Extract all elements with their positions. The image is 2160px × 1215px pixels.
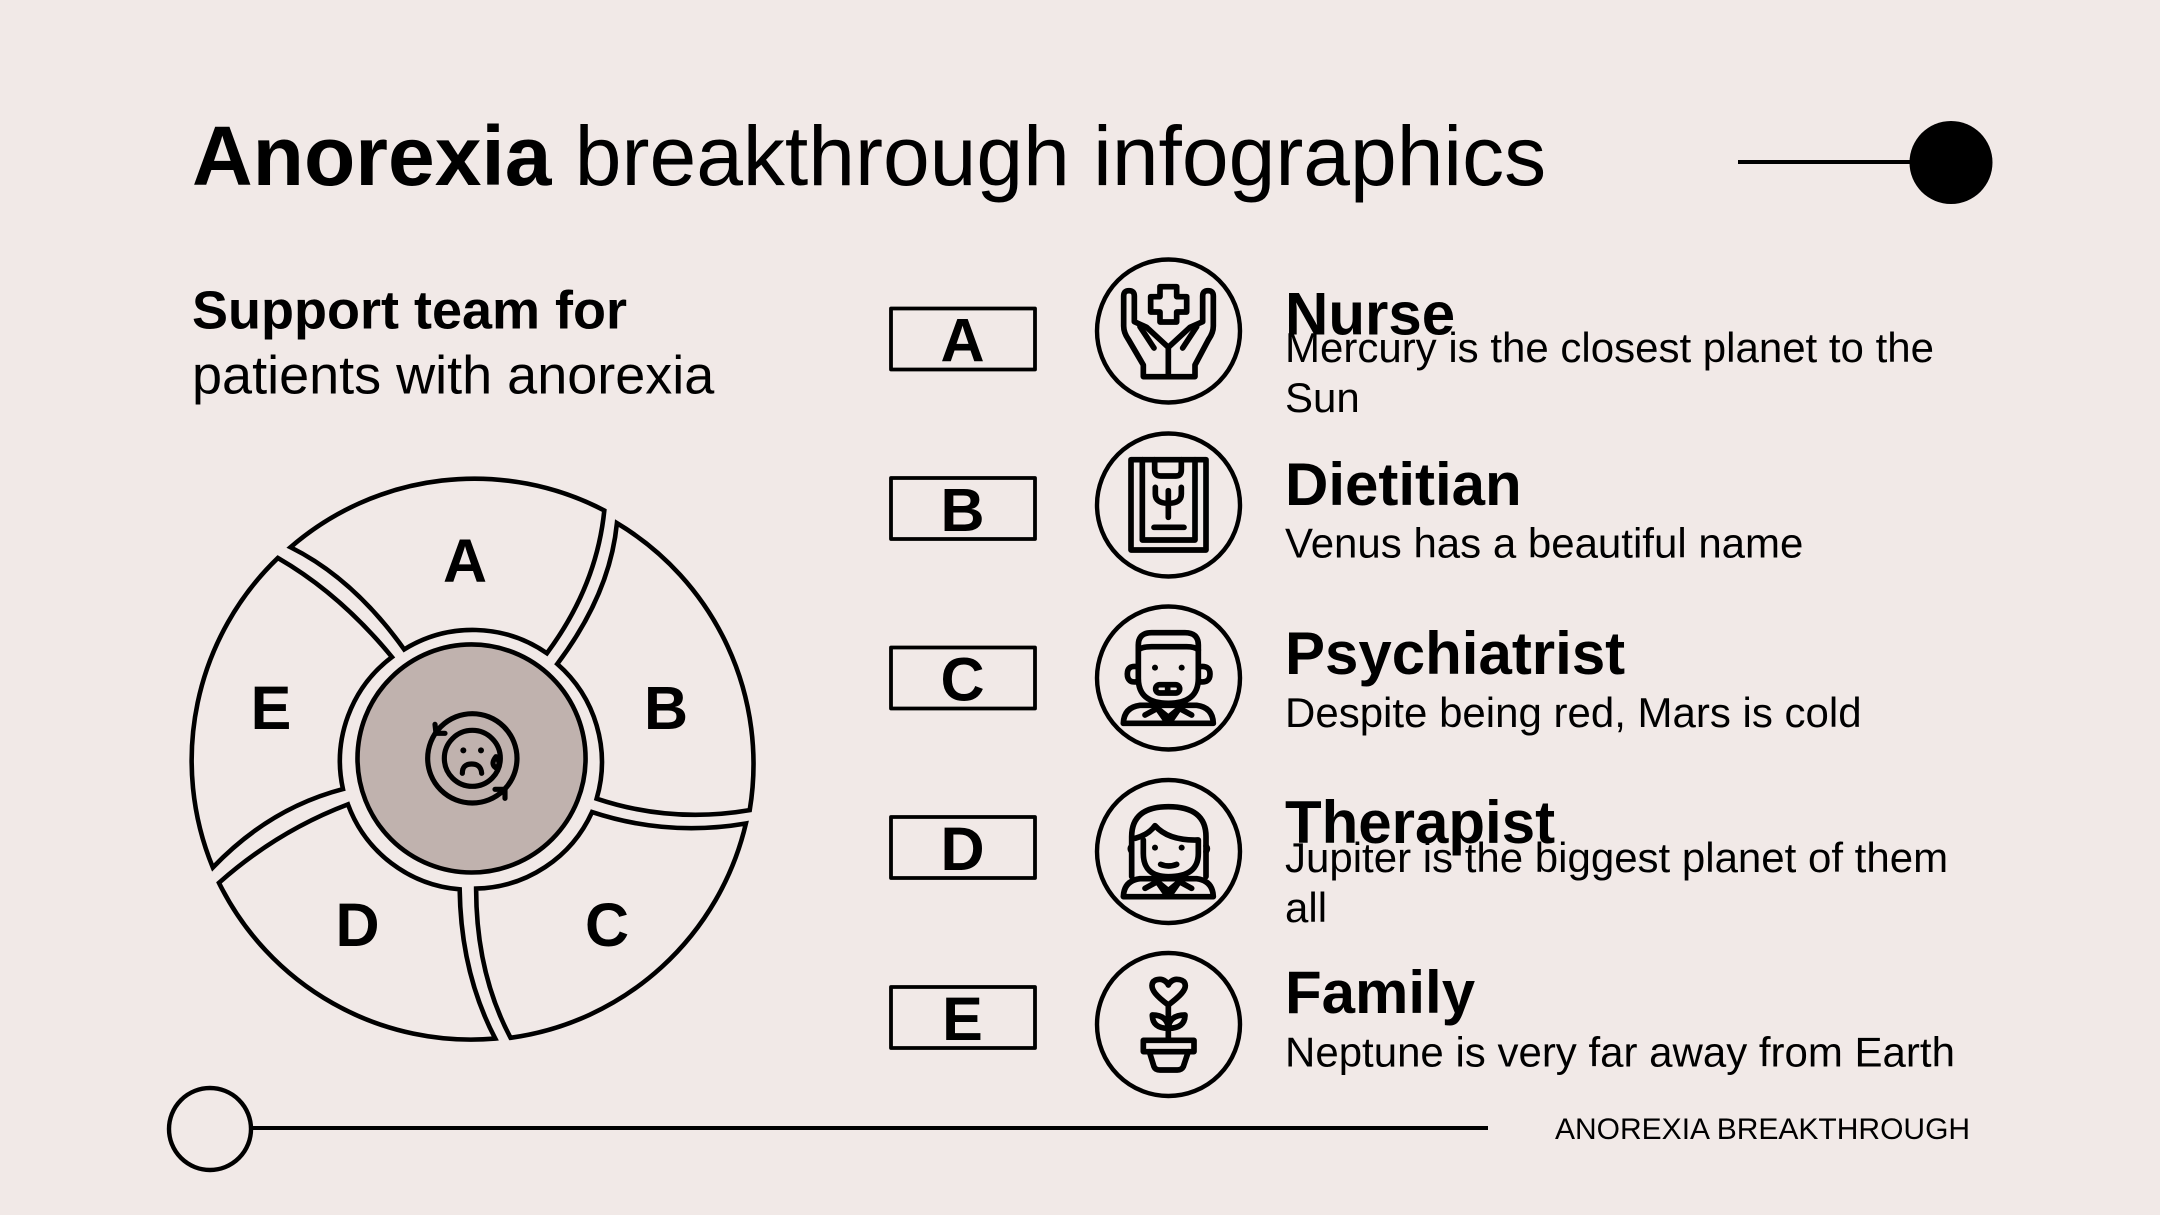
label box E [891, 985, 1035, 1053]
subtitle [192, 280, 715, 406]
center circle [357, 644, 586, 872]
segment B [557, 523, 754, 815]
wheel letter C: C [585, 891, 629, 959]
text: nurse: Mercury is the closest planet to the [1285, 324, 1934, 371]
label box A [891, 306, 1035, 374]
wheel letter D: D [335, 891, 380, 959]
row E [891, 953, 1955, 1096]
title: Anorexia breakthrough infographics [192, 109, 1546, 203]
segment C [476, 812, 746, 1038]
icon: therapist woman [1097, 780, 1240, 923]
label box A: A [940, 306, 985, 374]
icon: dietitian clipboard [1097, 434, 1240, 576]
icon: psychiatrist man [1097, 606, 1240, 750]
text: nurse: Nurse [1285, 280, 1455, 348]
row B [891, 434, 1803, 576]
row D [891, 780, 1948, 931]
text: psychiatrist [1285, 620, 1862, 736]
segment D [219, 804, 495, 1040]
label box E: E [942, 985, 983, 1053]
text: dietitian: Venus has a beautiful name [1285, 520, 1803, 566]
text: psychiatrist: Psychiatrist [1285, 620, 1625, 687]
decoration: bottom circle and line [169, 1088, 1488, 1170]
icon: nurse hands with cross [1097, 260, 1240, 402]
row A [891, 260, 1934, 421]
text: therapist: Therapist [1285, 789, 1555, 856]
decoration: top right line and dot [1738, 121, 1992, 204]
text: therapist: Jupiter is the biggest planet of them [1285, 834, 1948, 881]
text: therapist [1285, 789, 1948, 931]
text: nurse [1285, 280, 1934, 421]
label box C: C [940, 646, 985, 714]
text: family: Neptune is very far away from Earth [1285, 1028, 1955, 1076]
wheel letter B: B [644, 674, 688, 742]
segment E [192, 558, 392, 868]
subtitle: Support team for [192, 280, 627, 340]
text: psychiatrist: Despite being red, Mars is cold [1285, 689, 1862, 736]
icon: family plant with heart [1097, 953, 1240, 1096]
footer label: ANOREXIA BREAKTHROUGH [1555, 1113, 1970, 1146]
wheel letter E: E [251, 674, 291, 742]
wheel letter A: A [443, 527, 487, 595]
row C [891, 606, 1862, 750]
text: therapist: all [1285, 884, 1327, 931]
wheel diagram [192, 479, 754, 1040]
icon: sad face with cycle arrows [428, 714, 517, 803]
label box D: D [940, 815, 985, 883]
label box C [891, 646, 1035, 714]
segment A [291, 479, 604, 653]
text: family [1285, 959, 1955, 1076]
label box B [891, 476, 1035, 544]
subtitle: patients with anorexia [192, 346, 715, 406]
text: family: Family [1285, 959, 1476, 1026]
label box B: B [940, 476, 985, 544]
label box D [891, 815, 1035, 883]
text: dietitian [1285, 451, 1803, 566]
text: nurse: Sun [1285, 374, 1360, 421]
text: dietitian: Dietitian [1285, 451, 1522, 518]
